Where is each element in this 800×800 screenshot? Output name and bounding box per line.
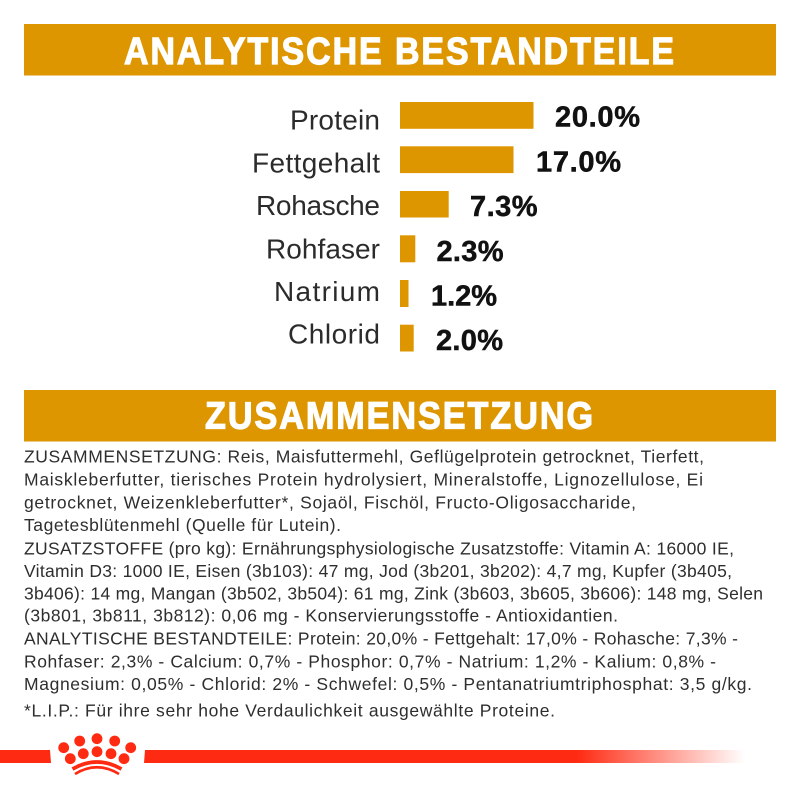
text block: composition details: Rohfaser: 2,3% - Calcium: 0,7% - Phosphor: 0,7% - Natrium: 1,2% - Kalium: 0,8% -: [24, 652, 716, 672]
row: natrium: 1.2%: [431, 280, 497, 312]
bar chart: analytical constituents: [252, 102, 640, 357]
row: rohfaser: 2.3%: [436, 236, 504, 268]
row: chlorid: 2.0%: [436, 325, 503, 357]
row: protein: 20.0%: [555, 102, 640, 134]
row: rohfaser: [266, 233, 504, 268]
row: chlorid: [288, 318, 503, 357]
heading: analytische bestandteile: [24, 24, 776, 76]
row: rohfaser: Rohfaser: [266, 233, 380, 264]
row: rohasche: Rohasche: [256, 190, 380, 221]
row: protein: Protein: [290, 104, 380, 136]
text block: composition details: ANALYTISCHE BESTANDTEILE: Protein: 20,0% - Fettgehalt: 17,0% - Rohasche: 7,3% -: [24, 628, 738, 648]
text block: composition details: Maiskleberfutter, tierisches Protein hydrolysiert, Mineralstoffe, Lignozellulose, Ei: [24, 470, 703, 490]
text block: composition details: Magnesium: 0,05% - Chlorid: 2% - Schwefel: 0,5% - Pentanatriumtriphosphat: 3,5 g/kg.: [24, 674, 752, 694]
row: protein: [290, 102, 640, 136]
icon: royal canin crown logo: [58, 733, 136, 774]
text block: composition details: Vitamin D3: 1000 IE, Eisen (3b103): 47 mg, Jod (3b201, 3b202): 4,7 mg, Kupfer (3b405,: [24, 561, 732, 581]
text block: composition details: 3b406): 14 mg, Mangan (3b502, 3b504): 61 mg, Zink (3b603, 3b605, 3b606): 148 mg, Selen: [24, 583, 763, 603]
text block: composition details: (3b801, 3b811, 3b812): 0,06 mg - Konservierungsstoffe - Antioxidantien.: [24, 606, 618, 626]
row: natrium: Natrium: [274, 276, 380, 307]
row: rohasche: 7.3%: [470, 191, 538, 223]
text block: composition details: ZUSAMMENSETZUNG: Reis, Maisfuttermehl, Geflügelprotein getrocknet, Tierfett,: [24, 447, 704, 467]
text block: composition details: *L.I.P.: Für ihre sehr hohe Verdaulichkeit ausgewählte Proteine.: [24, 701, 555, 721]
heading: zusammensetzung: ZUSAMMENSETZUNG: [205, 396, 595, 438]
text block: composition details: Tagetesblütenmehl (Quelle für Lutein).: [24, 515, 341, 535]
row: fettgehalt: Fettgehalt: [252, 148, 380, 179]
footer stripe: right red fade: [144, 750, 745, 763]
row: chlorid: Chlorid: [288, 318, 380, 349]
heading: zusammensetzung: [24, 390, 776, 442]
text block: composition details: ZUSATZSTOFFE (pro kg): Ernährungsphysiologische Zusatzstoffe: Vitamin A: 16000 IE,: [24, 538, 734, 558]
text block: composition details: [24, 447, 763, 721]
footer stripe: left red: [0, 750, 51, 763]
heading: analytische bestandteile: ANALYTISCHE BESTANDTEILE: [124, 31, 676, 73]
row: natrium: [274, 276, 497, 312]
row: rohasche: [256, 190, 538, 223]
row: fettgehalt: [252, 146, 621, 179]
text block: composition details: getrocknet, Weizenkleberfutter*, Sojaöl, Fischöl, Fructo-Oligosaccharide,: [24, 492, 636, 512]
row: fettgehalt: 17.0%: [536, 146, 621, 178]
